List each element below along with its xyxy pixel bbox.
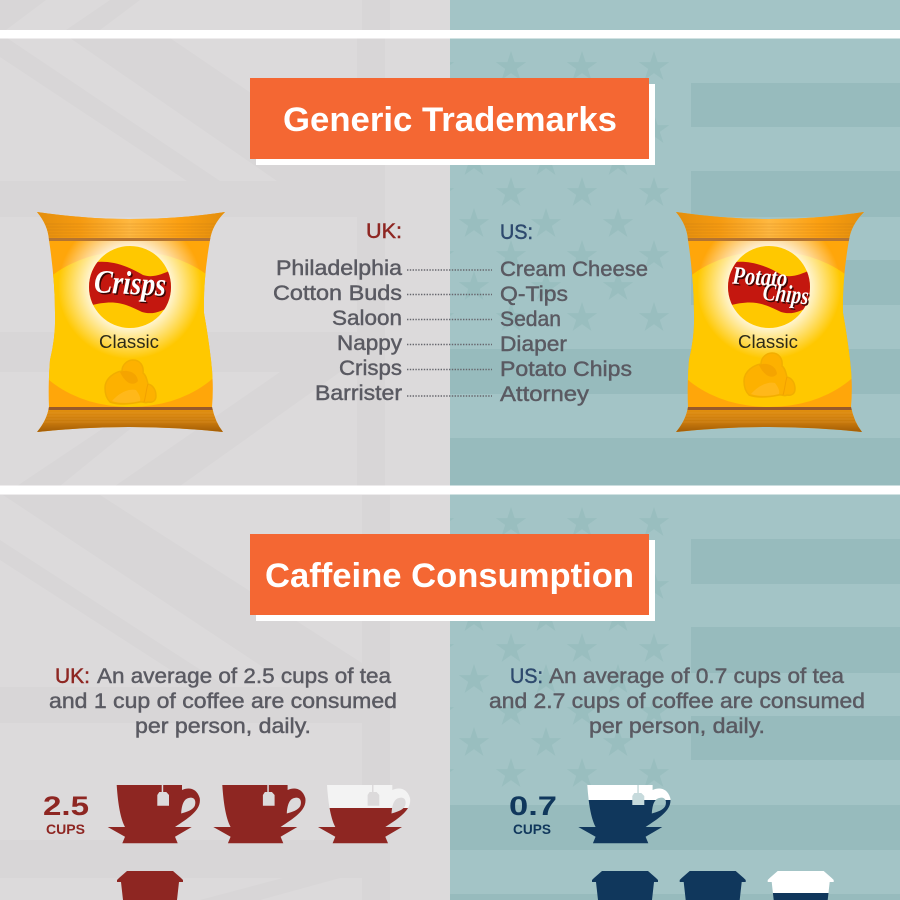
icon: US potato chips bag: [662, 205, 876, 437]
text block: US caffeine: An average of 0.7 cups of tea: [549, 665, 844, 688]
icon: UK tea cup 2 full: [213, 785, 306, 843]
icon: UK crisps bag: Crisps: [93, 264, 167, 304]
text block: UK caffeine: An average of 2.5 cups of tea: [97, 665, 391, 688]
heading: Caffeine Consumption: Caffeine Consumption: [265, 557, 634, 595]
stat: US 0.7 cups: CUPS: [513, 821, 551, 837]
list: UK terms: Barrister: [315, 382, 402, 405]
dotted connector lines: [407, 270, 492, 396]
text block: US caffeine: and 2.7 cups of coffee are consumed: [489, 690, 865, 713]
list: UK terms: Saloon: [332, 307, 402, 330]
icon: UK coffee cup: [117, 871, 183, 900]
icon: US potato chips bag: Potato: [732, 264, 789, 294]
text block: US caffeine: US:: [510, 665, 543, 688]
list: UK terms: [273, 257, 403, 405]
text block: UK caffeine: [49, 665, 397, 738]
list: US terms: Sedan: [500, 308, 561, 331]
stat: UK 2.5 cups: CUPS: [46, 821, 85, 837]
stat: US 0.7 cups: 0.7: [509, 791, 557, 821]
icon: US coffee cup 1: [592, 871, 658, 900]
icon: UK crisps bag: [23, 205, 237, 437]
text block: US caffeine: per person, daily.: [589, 715, 765, 738]
heading: Generic Trademarks: [250, 78, 655, 165]
icon: UK crisps bag: Classic: [99, 332, 159, 352]
list: UK terms: Cotton Buds: [273, 282, 402, 305]
icon: US potato chips bag: Potato: [731, 263, 788, 292]
text block: UK caffeine: UK:: [55, 665, 90, 688]
icon: US potato chips bag: Chips: [761, 279, 810, 310]
icon: US coffee cup 3 partly full: [768, 871, 834, 900]
list: US terms: Diaper: [500, 333, 567, 356]
list: US terms: Q-Tips: [500, 283, 568, 306]
list: US terms: [500, 258, 648, 406]
text block: UK caffeine: and 1 cup of coffee are consumed: [49, 690, 397, 713]
icon: UK crisps bag: Crisps: [95, 266, 168, 305]
stat: UK 2.5 cups: 2.5: [43, 791, 89, 821]
icon: UK tea cup 3 half full: [318, 785, 410, 843]
text block: US caffeine: [489, 665, 865, 738]
icon: US coffee cup 2: [680, 871, 746, 900]
icon: UK tea cup 1 full: [108, 785, 200, 843]
panel: UK background: [0, 0, 450, 900]
list: US terms: Attorney: [500, 383, 590, 406]
list: US terms: Potato Chips: [500, 358, 632, 381]
column heading: US: US:: [500, 221, 533, 244]
column heading: UK: UK:: [366, 220, 402, 243]
list: UK terms: Crisps: [339, 357, 402, 380]
list: US terms: Cream Cheese: [500, 258, 648, 281]
panel: US flag background: [424, 0, 900, 900]
heading: Generic Trademarks: Generic Trademarks: [283, 101, 617, 139]
section dividers: [0, 30, 900, 494]
heading: Caffeine Consumption: [250, 534, 655, 621]
icon: US tea cup partly full: [578, 785, 671, 843]
icon: US potato chips bag: Chips: [763, 280, 811, 312]
stat: UK 2.5 cups: [43, 791, 89, 837]
list: UK terms: Nappy: [337, 332, 403, 355]
text block: UK caffeine: per person, daily.: [135, 715, 311, 738]
list: UK terms: Philadelphia: [276, 257, 402, 280]
stat: US 0.7 cups: [509, 791, 557, 837]
icon: US potato chips bag: Classic: [738, 332, 798, 352]
